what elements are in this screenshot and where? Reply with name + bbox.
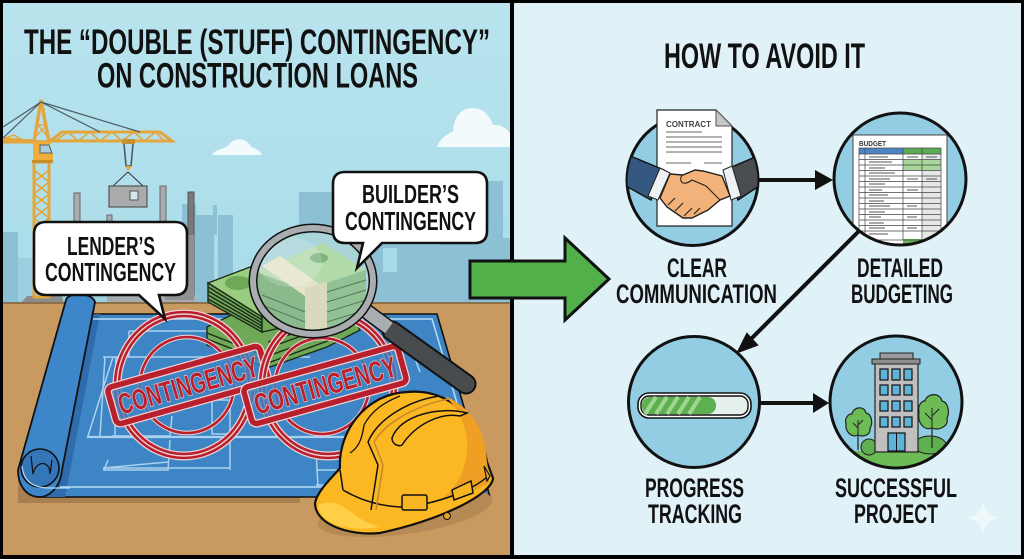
icon: handshake bbox=[626, 155, 762, 218]
speech bubble: builder's contingency bbox=[333, 172, 487, 268]
heading: how to avoid it: HOW TO AVOID IT bbox=[664, 37, 865, 76]
unfinished building frame bbox=[20, 186, 195, 305]
ground bbox=[3, 302, 510, 555]
cloud: right bbox=[437, 108, 510, 147]
label: SUCCESSFUL bbox=[835, 473, 957, 503]
blueprint sheet bbox=[40, 314, 490, 497]
heading: left title bbox=[24, 23, 490, 96]
money stacks bbox=[207, 250, 363, 368]
step 1: clear communication bbox=[616, 110, 777, 309]
label: DETAILED bbox=[857, 253, 943, 283]
speech bubble: lender's contingency bbox=[34, 222, 187, 319]
step 1: clear communication: COMMUNICATION bbox=[616, 279, 777, 309]
hard hat bbox=[315, 392, 495, 546]
speech bubble: lender's contingency: LENDER’S bbox=[67, 231, 155, 261]
label: PROGRESS bbox=[645, 473, 744, 503]
sparkle watermark bbox=[966, 501, 1000, 536]
arrow: budgeting to progress bbox=[738, 231, 859, 352]
icon: progress bar bbox=[638, 393, 751, 418]
icon: contract bbox=[657, 110, 732, 226]
step 2: detailed budgeting bbox=[834, 113, 966, 309]
speech bubble: builder's contingency: CONTINGENCY bbox=[345, 206, 476, 236]
icon: contract: CONTRACT bbox=[666, 119, 712, 129]
step 4: successful project bbox=[828, 334, 964, 524]
panel: right how to avoid it bbox=[514, 3, 1021, 555]
icon: budget sheet bbox=[853, 135, 947, 247]
label: CLEAR bbox=[667, 253, 727, 283]
arrow: communication to budgeting bbox=[759, 170, 833, 190]
icon: budget sheet: BUDGET bbox=[859, 139, 886, 148]
icon: office building with trees bbox=[845, 352, 949, 466]
stamp text: CONTINGENCY bbox=[251, 352, 400, 421]
panel: left scene bbox=[3, 3, 510, 555]
blueprint roll bbox=[18, 294, 95, 497]
cloud: small bbox=[212, 139, 262, 155]
skyline bbox=[3, 181, 510, 304]
speech bubble: builder's contingency: BUILDER’S bbox=[362, 179, 459, 209]
heading: left title: THE “DOUBLE (STUFF) CONTINGENCY” bbox=[24, 23, 490, 62]
step 3: progress tracking bbox=[628, 336, 760, 529]
stamp: right contingency bbox=[243, 314, 407, 456]
arrow: large green bbox=[470, 238, 609, 320]
magnifying glass bbox=[250, 225, 466, 384]
heading: left title: ON CONSTRUCTION LOANS bbox=[97, 56, 418, 96]
speech bubble: lender's contingency: CONTINGENCY bbox=[45, 257, 176, 287]
step 3: progress tracking: TRACKING bbox=[648, 499, 742, 529]
step 4: successful project: PROJECT bbox=[854, 499, 938, 529]
tower crane bbox=[3, 100, 172, 297]
stamp text: CONTINGENCY bbox=[115, 352, 262, 421]
stamp: left contingency bbox=[107, 314, 269, 456]
arrow: progress to success bbox=[760, 393, 829, 413]
step 2: detailed budgeting: BUDGETING bbox=[851, 279, 953, 309]
blueprint plan lines bbox=[87, 331, 420, 487]
roll shadow bbox=[18, 480, 300, 503]
